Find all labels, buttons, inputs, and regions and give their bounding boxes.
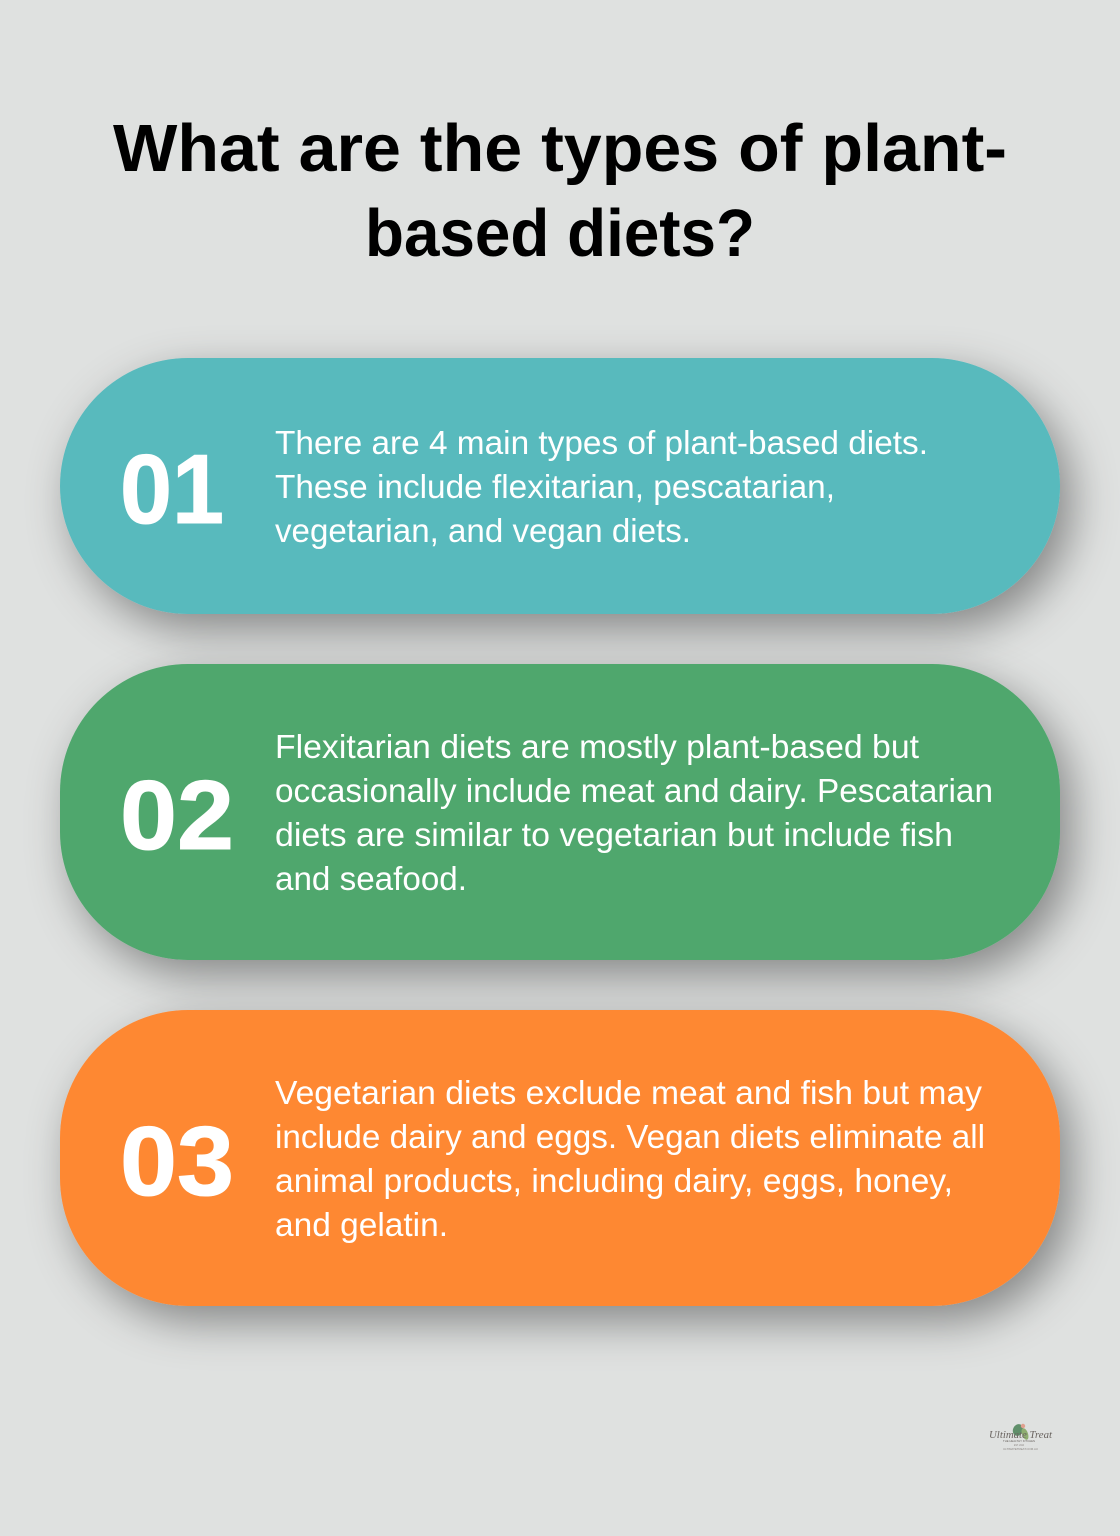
logo: Ultimate Treat [989, 1422, 1053, 1451]
text block 03 [275, 1074, 985, 1243]
number 03: 03 [120, 1106, 234, 1216]
text block 02: occasionally include meat and dairy. Pescatarian [275, 772, 993, 809]
logo: Ultimate Treat: Ultimate Treat [989, 1429, 1053, 1441]
logo: Ultimate Treat: ULTIMATETREAT.COM.AU [1003, 1447, 1038, 1451]
icon: leaves [1011, 1422, 1030, 1441]
pill background 03 [60, 1010, 1060, 1306]
number 02: 02 [120, 760, 234, 870]
text block 02: diets are similar to vegetarian but include fish [275, 816, 953, 853]
text block 03: include dairy and eggs. Vegan diets eliminate all [275, 1118, 985, 1155]
panel: step 03 [60, 1010, 1060, 1306]
pill background 02 [60, 664, 1060, 960]
panel: step 02 [60, 664, 1060, 960]
text block 01: vegetarian, and vegan diets. [275, 512, 691, 549]
pill background 01 [60, 358, 1060, 614]
title: What are the types of plant- [113, 111, 1007, 186]
title: based diets? [365, 196, 755, 271]
text block 03: animal products, including dairy, eggs, honey, [275, 1162, 953, 1199]
text block 02 [275, 728, 993, 897]
text block 01 [275, 424, 928, 549]
text block 03: Vegetarian diets exclude meat and fish but may [275, 1074, 983, 1111]
logo: Ultimate Treat: THE HEALTHY KITCHEN [1003, 1439, 1035, 1443]
text block 01: There are 4 main types of plant-based diets. [275, 424, 928, 461]
text block 02: Flexitarian diets are mostly plant-based but [275, 728, 919, 765]
text block 01: These include flexitarian, pescatarian, [275, 468, 835, 505]
text block 03: and gelatin. [275, 1206, 448, 1243]
number 01: 01 [120, 434, 224, 544]
text block 02: and seafood. [275, 860, 467, 897]
logo: Ultimate Treat: EST. 2024 [1014, 1443, 1024, 1447]
panel: step 01 [60, 358, 1060, 614]
title [113, 111, 1007, 271]
